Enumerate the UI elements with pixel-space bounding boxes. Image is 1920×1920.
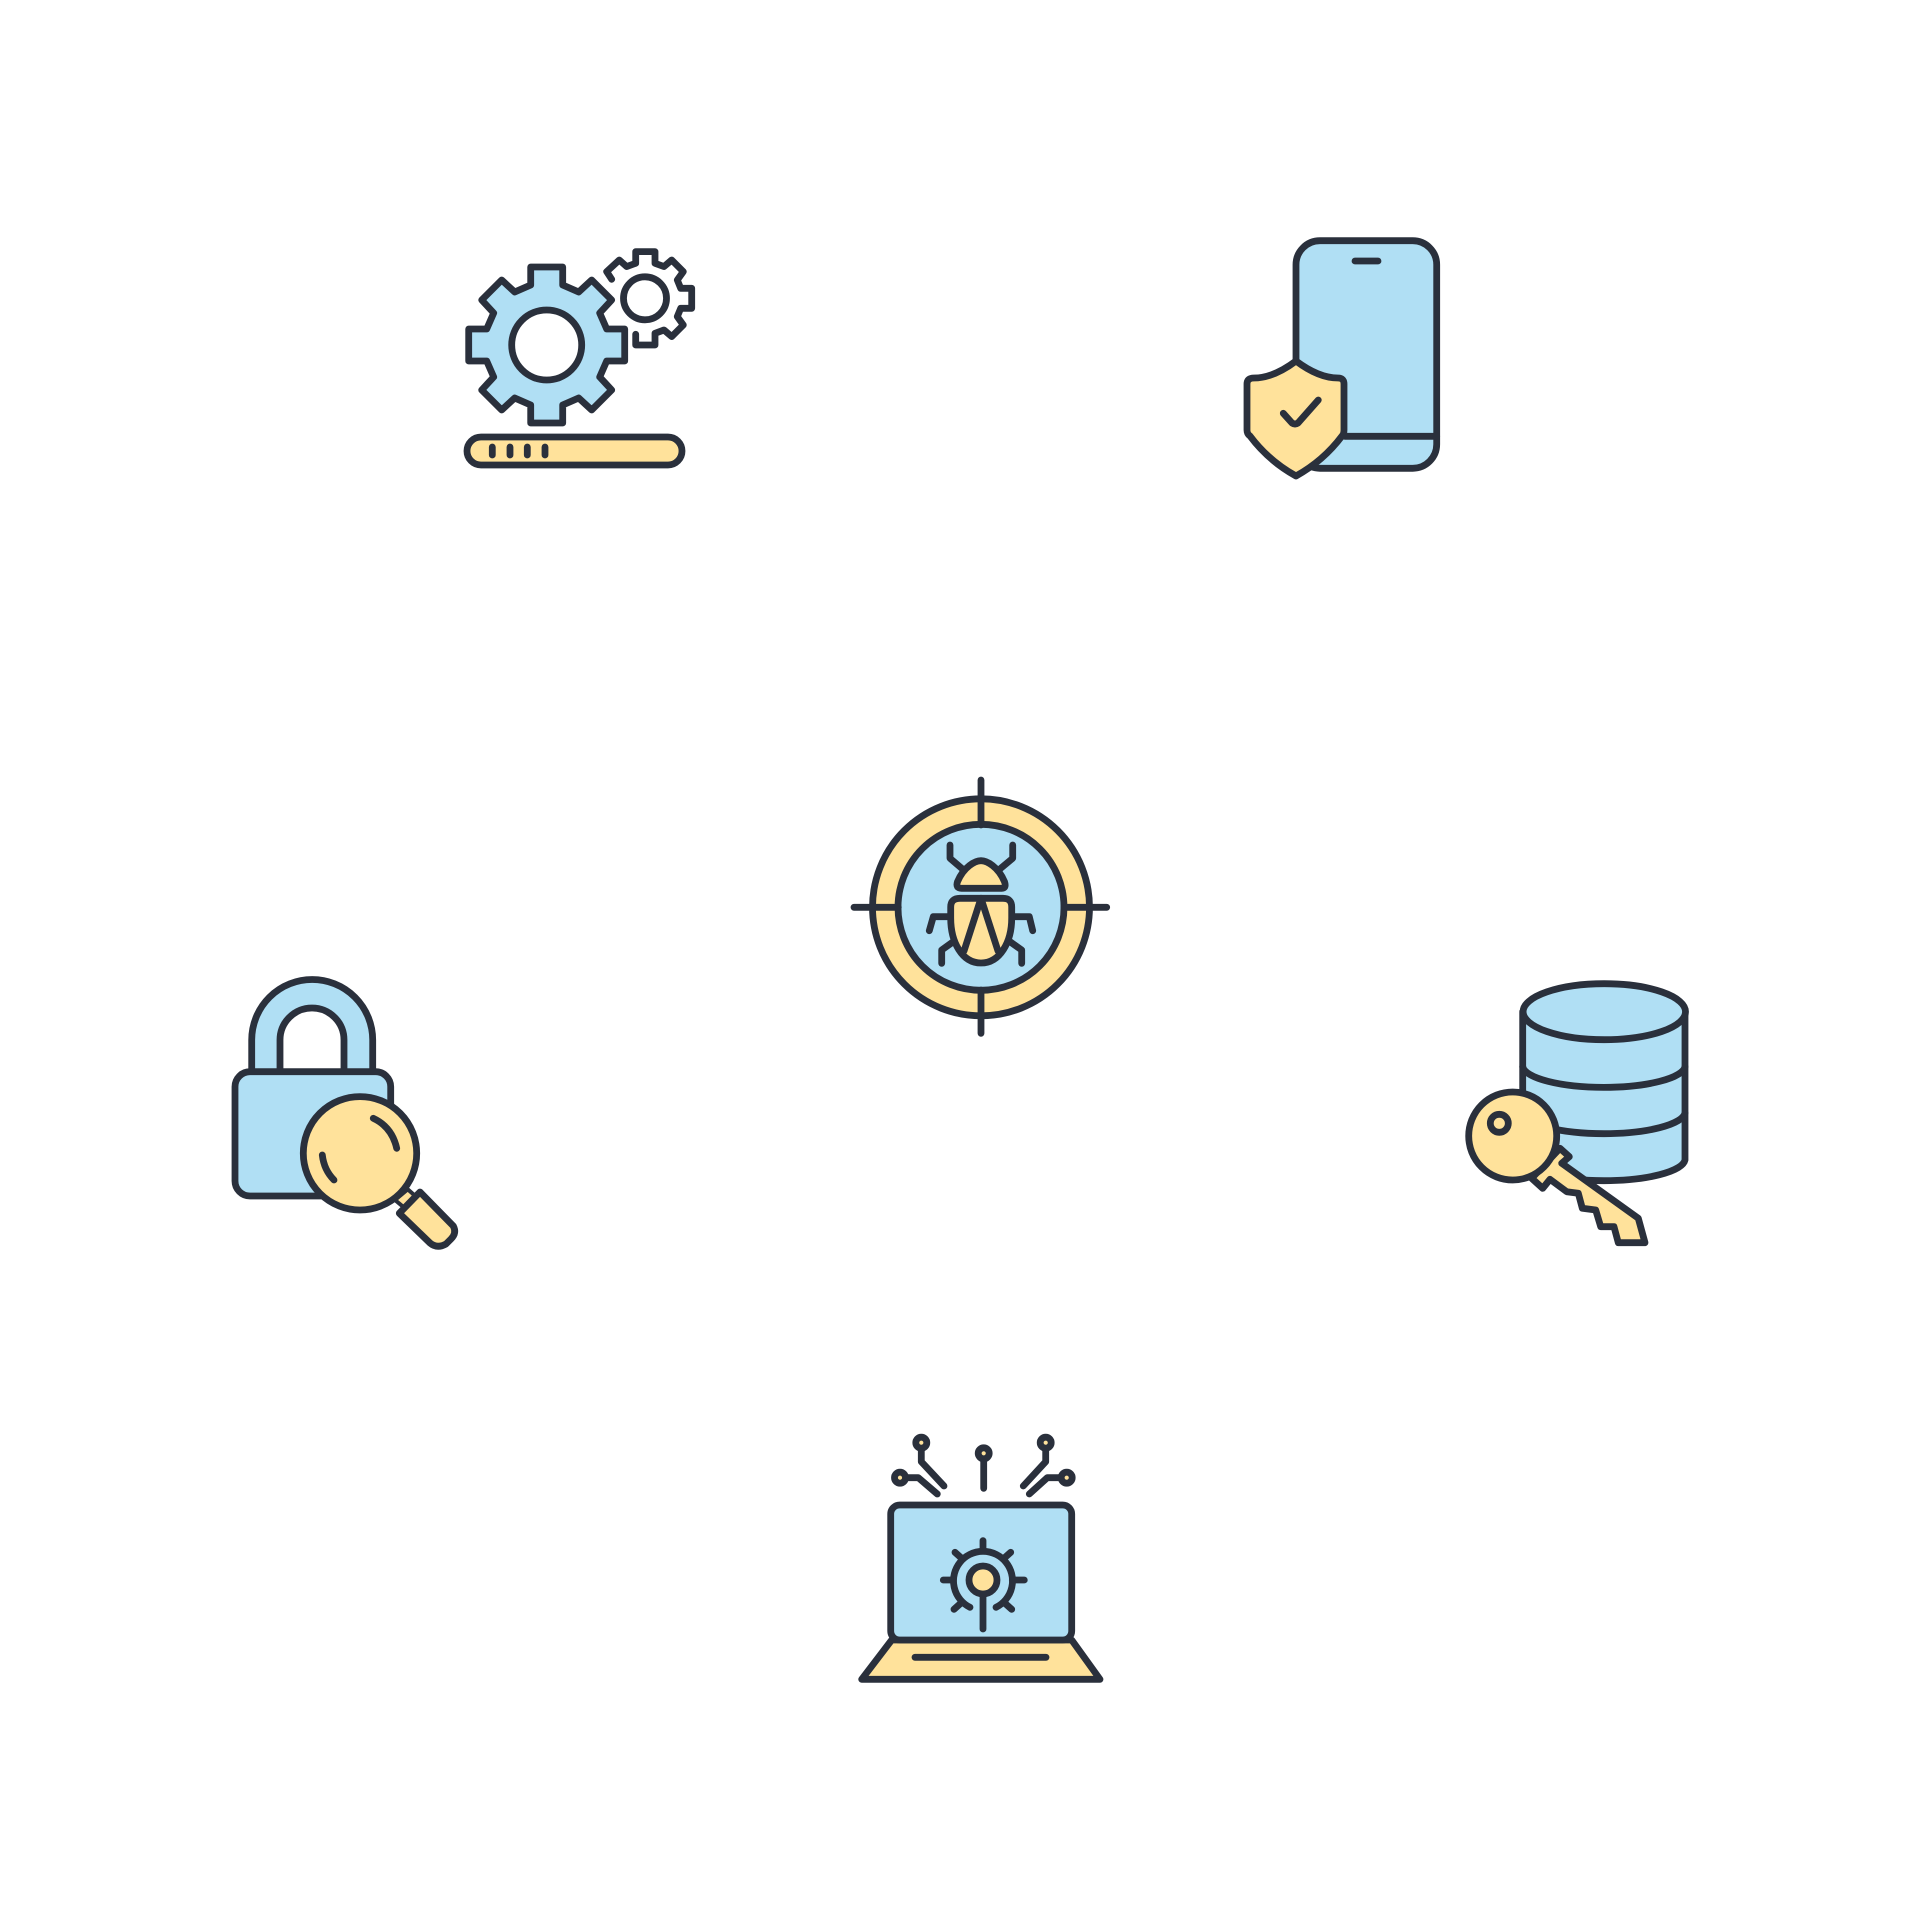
icon: padlock with magnifier bbox=[235, 980, 455, 1246]
small gear bbox=[607, 252, 692, 345]
target rings bbox=[854, 780, 1107, 1033]
phone bbox=[1296, 241, 1437, 468]
laptop screen bbox=[891, 1505, 1072, 1640]
icon: bug in crosshair bbox=[854, 780, 1107, 1033]
icon: database with key bbox=[1469, 984, 1686, 1243]
shield with check bbox=[1247, 361, 1344, 476]
icon: laptop with circuit bbox=[862, 1437, 1100, 1679]
icon: gears with progress bar bbox=[467, 252, 692, 465]
screen gear emblem bbox=[943, 1541, 1024, 1629]
database bbox=[1523, 984, 1686, 1181]
padlock bbox=[235, 980, 391, 1196]
large gear bbox=[469, 267, 625, 423]
progress bar bbox=[467, 437, 682, 465]
bug bbox=[929, 845, 1033, 963]
key bbox=[1469, 1092, 1645, 1243]
magnifier bbox=[303, 1097, 455, 1246]
laptop base bbox=[862, 1640, 1100, 1679]
icon: phone with shield bbox=[1247, 241, 1437, 476]
circuit nodes bbox=[894, 1437, 1072, 1494]
